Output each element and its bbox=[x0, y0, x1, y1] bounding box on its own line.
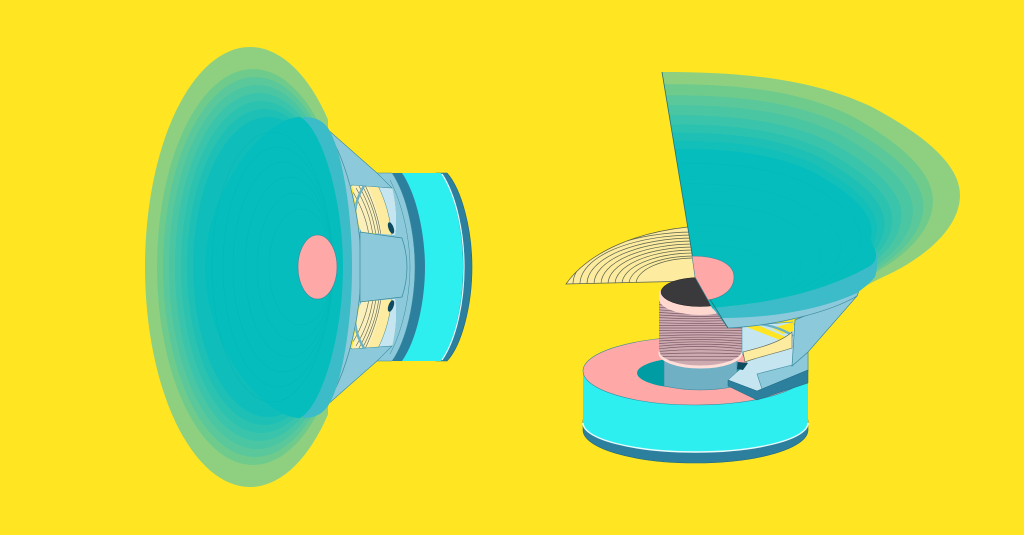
spider bbox=[565, 226, 695, 284]
basket arm bbox=[792, 296, 857, 366]
pole piece bbox=[664, 350, 737, 390]
speaker: cutaway view bbox=[566, 72, 960, 463]
basket plate bbox=[376, 173, 415, 361]
dust cap half bbox=[692, 256, 734, 300]
magnet base bbox=[583, 337, 808, 463]
coil collar bbox=[659, 291, 742, 315]
basket strip bbox=[326, 128, 361, 406]
upper window bbox=[352, 185, 396, 235]
lower window bbox=[352, 299, 396, 349]
magnet body bbox=[400, 173, 463, 361]
dark ring bbox=[392, 173, 425, 361]
cut edge line bbox=[662, 72, 728, 328]
basket upper arm bbox=[326, 128, 392, 190]
magnet back rim bbox=[436, 173, 472, 361]
illustration: loudspeaker whole and cutaway bbox=[145, 47, 960, 487]
central basket arm bbox=[360, 232, 407, 302]
voice coil bbox=[659, 296, 742, 368]
basket strip bbox=[712, 288, 860, 328]
basket floor bbox=[728, 322, 808, 400]
cone rim bbox=[712, 247, 878, 318]
dust cap bbox=[298, 235, 337, 299]
cone contour lines bbox=[212, 132, 333, 402]
cone body bbox=[690, 197, 876, 308]
cone rings bbox=[662, 72, 960, 308]
speaker: assembled side view bbox=[145, 47, 472, 487]
coil opening bbox=[661, 278, 739, 306]
cone body bbox=[205, 117, 343, 418]
cone contour lines bbox=[682, 163, 861, 294]
cone rings bbox=[145, 47, 355, 487]
cone rim bbox=[303, 117, 352, 418]
basket lower arm bbox=[326, 344, 392, 406]
